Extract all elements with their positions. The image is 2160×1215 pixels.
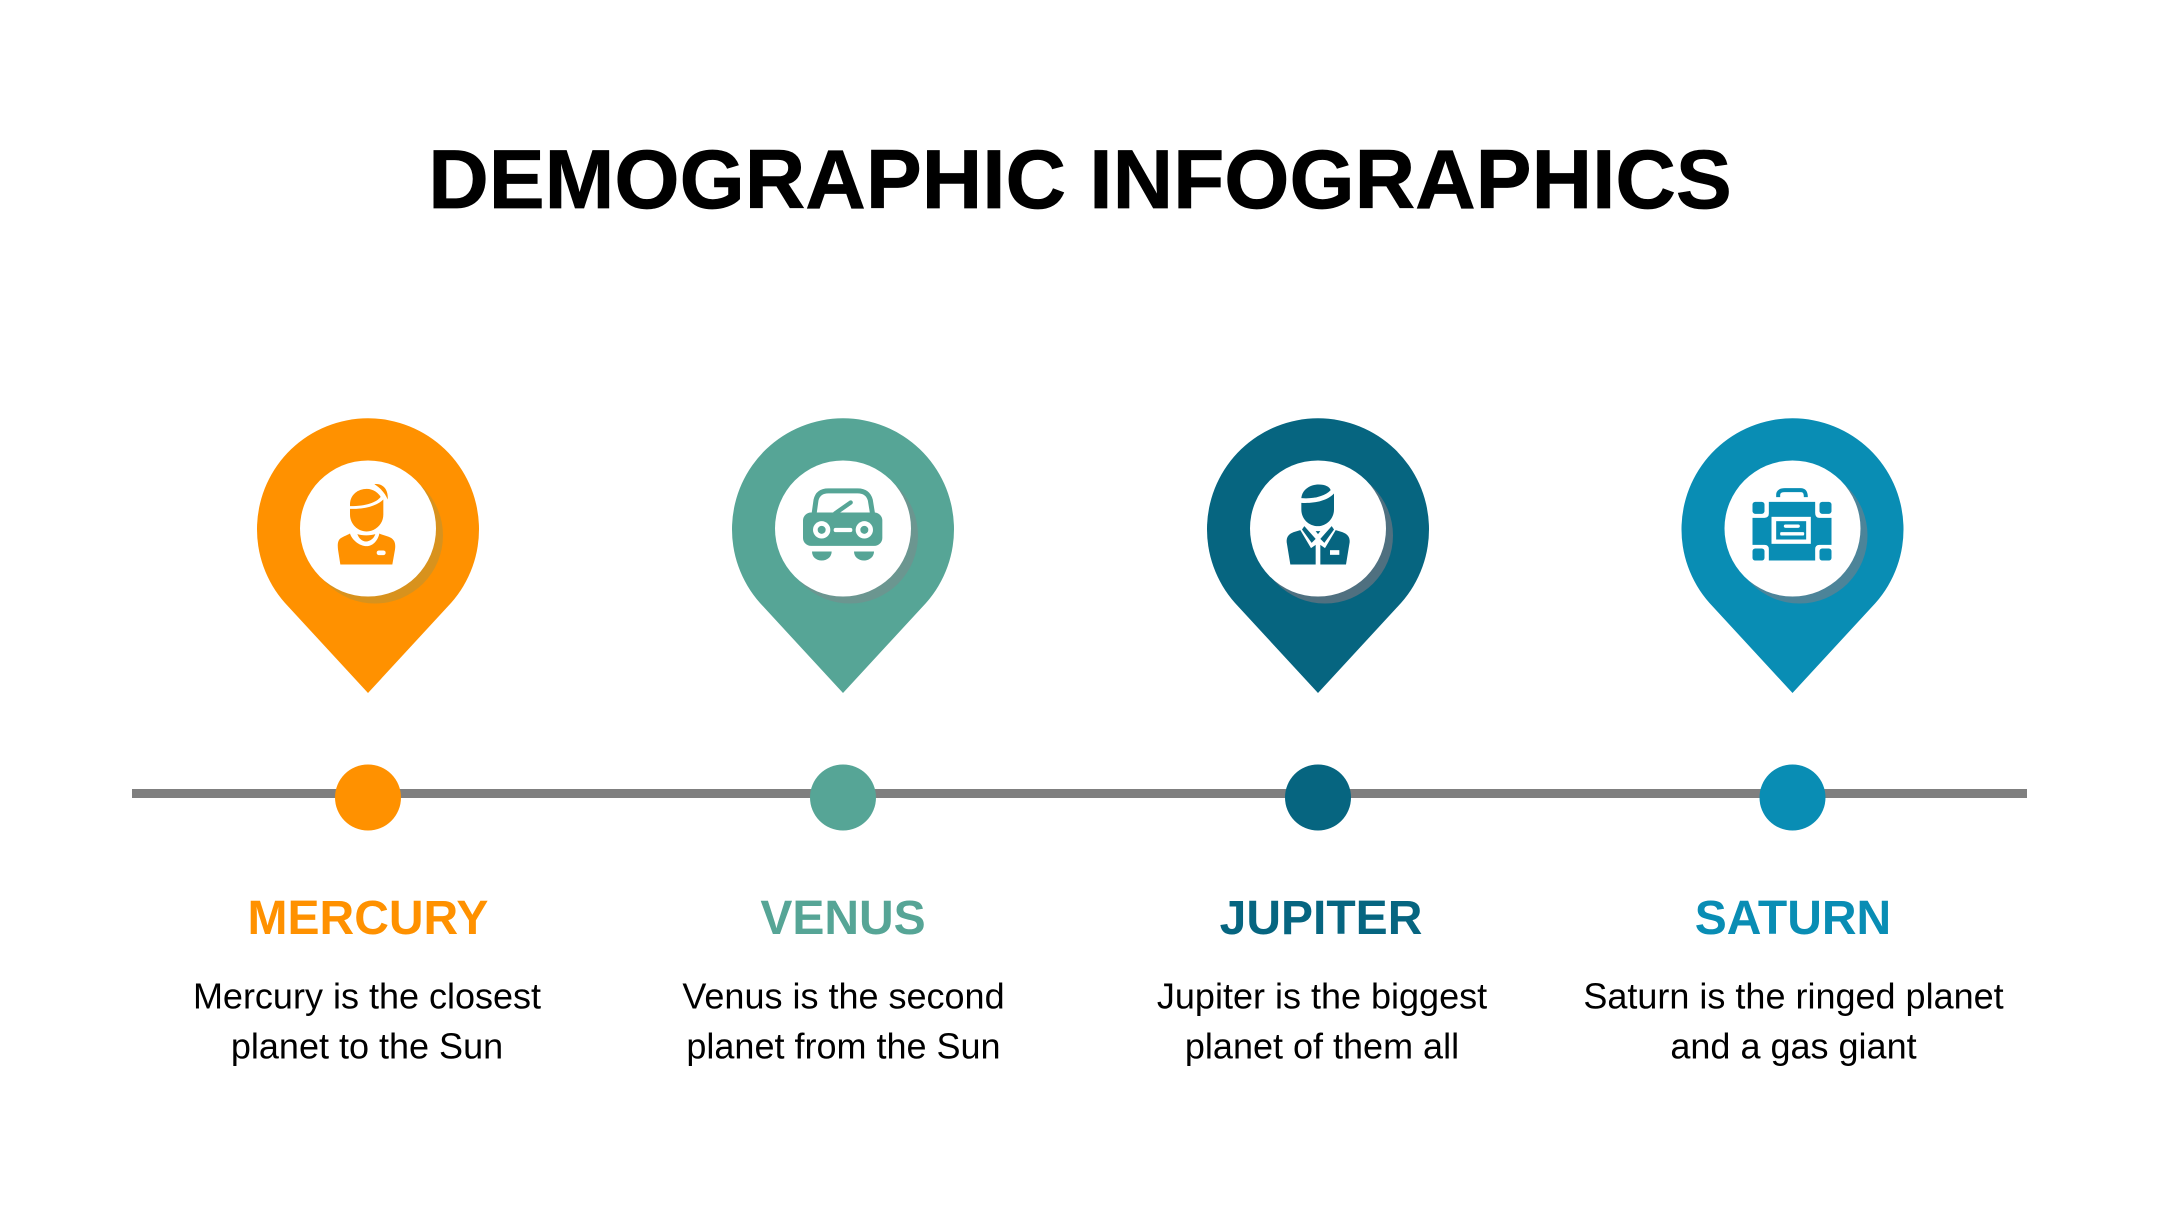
description: venus: Venus is the second <box>682 976 1005 1016</box>
timeline dot: mercury <box>335 764 401 830</box>
heading: jupiter: JUPITER <box>1220 892 1422 945</box>
description: mercury: planet to the Sun <box>231 1026 503 1066</box>
icon: suitcase <box>1753 490 1831 560</box>
map pin: saturn <box>1682 418 1904 693</box>
panel: saturn <box>1583 418 2004 1066</box>
panel: mercury <box>193 418 541 1066</box>
timeline dot: venus <box>810 764 876 830</box>
pin shadow: venus <box>782 468 918 604</box>
description: saturn: Saturn is the ringed planet <box>1583 976 2004 1016</box>
pin shadow: saturn <box>1732 468 1868 604</box>
map pin: mercury <box>257 418 479 693</box>
description: venus: planet from the Sun <box>686 1026 1001 1066</box>
description: saturn: and a gas giant <box>1670 1026 1917 1066</box>
icon: man in suit <box>1287 485 1350 564</box>
map pin: jupiter <box>1207 418 1429 693</box>
icon: woman <box>338 484 395 564</box>
description: jupiter: planet of them all <box>1185 1026 1459 1066</box>
icon: car <box>803 491 882 560</box>
heading: saturn: SATURN <box>1695 892 1891 945</box>
pin white circle: jupiter <box>1250 460 1386 596</box>
description: mercury: Mercury is the closest <box>193 976 541 1016</box>
description: jupiter: Jupiter is the biggest <box>1157 976 1487 1016</box>
heading: venus: VENUS <box>760 892 926 945</box>
pin white circle: venus <box>775 460 911 596</box>
panel: venus <box>682 418 1005 1066</box>
pin shadow: mercury <box>307 468 443 604</box>
pin white circle: saturn <box>1724 460 1860 596</box>
timeline line <box>132 789 2027 798</box>
pin white circle: mercury <box>300 460 436 596</box>
timeline dot: jupiter <box>1285 764 1351 830</box>
heading: mercury: MERCURY <box>248 892 488 945</box>
panel: jupiter <box>1157 418 1487 1066</box>
map pin: venus <box>732 418 954 693</box>
timeline dot: saturn <box>1760 764 1826 830</box>
pin shadow: jupiter <box>1257 468 1393 604</box>
title: DEMOGRAPHIC INFOGRAPHICS <box>428 132 1732 226</box>
